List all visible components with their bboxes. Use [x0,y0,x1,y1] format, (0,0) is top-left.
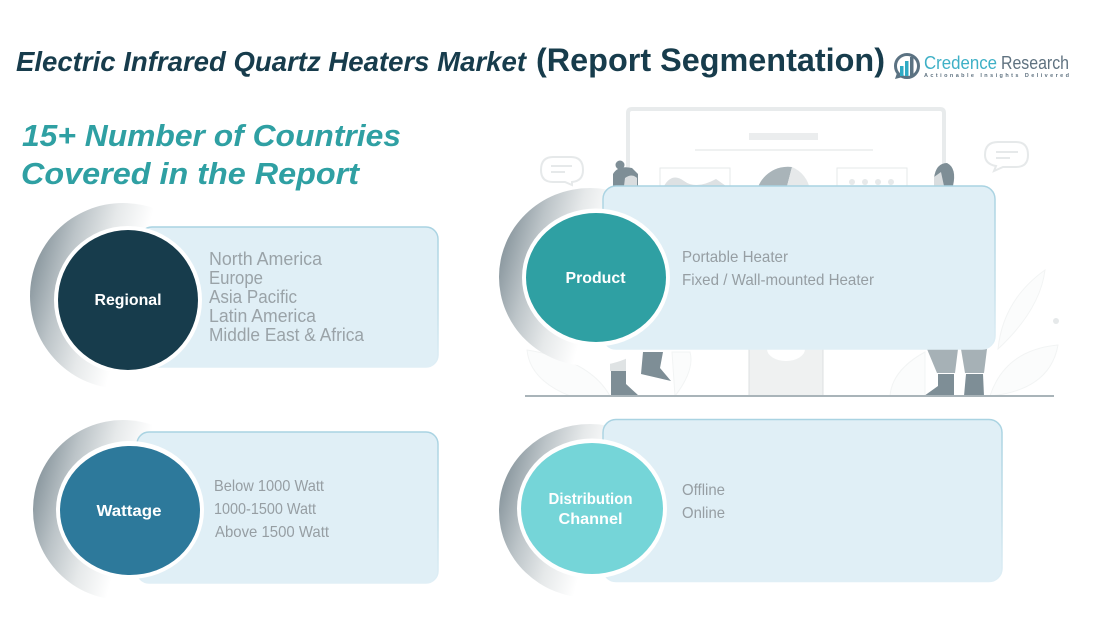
list: Fixed / Wall-mounted Heater [682,272,875,289]
logo: Credence Research [895,53,1069,79]
text card [603,420,1002,582]
panel: Regional [30,203,438,389]
logo: Credence Research: Research [1001,53,1069,73]
ground line [525,395,1054,397]
gradient ring [30,203,216,389]
gradient ring [33,420,213,600]
figure: left person [610,160,671,396]
panel: Regional: Regional [94,292,162,309]
panel: Distribution Channel [499,420,1002,598]
gradient ring [499,424,681,598]
badge [517,438,667,578]
subheading: countries covered: Covered in the Report [21,156,361,191]
panel: Product: Product [566,270,626,287]
list: North America [209,249,323,269]
subheading: countries covered [21,118,401,191]
panel: Product [499,186,995,366]
list: Below 1000 Watt [214,478,325,495]
badge [522,208,670,346]
badge label [548,491,632,528]
logo: Credence Research: Credence [924,53,997,73]
subheading: countries covered: 15+ Number of Countries [22,118,401,153]
title: Electric Infrared Quartz Heaters Market [16,46,528,77]
gradient ring [499,188,681,366]
badge [56,441,204,579]
list: 1000-1500 Watt [214,501,316,518]
background illustration: people holding a presentation board [525,109,1059,397]
list: Portable Heater [682,249,789,266]
title [16,42,885,78]
title: (Report Segmentation) [536,42,885,78]
speech bubbles [541,142,1028,185]
badge label: Distribution [548,491,632,508]
icon: logo bar chart badge [895,54,918,79]
panel: Wattage [33,420,438,600]
text card [603,186,995,349]
list: Latin America [209,306,317,326]
panel: Wattage: Wattage [96,503,162,520]
list: Above 1500 Watt [215,524,330,541]
list: Offline [682,482,725,499]
logo: Credence Research: Actionable Insights Delivered [924,73,1069,79]
badge [54,226,202,374]
list [682,249,875,289]
list: Europe [209,268,263,288]
figure: right person [924,163,987,396]
decorative leaves [527,270,1058,396]
badge label: Channel [558,511,622,528]
list [682,482,725,522]
list [209,249,365,345]
list: Middle East & Africa [209,325,365,345]
presentation board [628,109,944,396]
text card [137,432,438,583]
list: Online [682,505,725,522]
list: Asia Pacific [209,287,297,307]
list [214,478,330,541]
text card [140,227,438,367]
